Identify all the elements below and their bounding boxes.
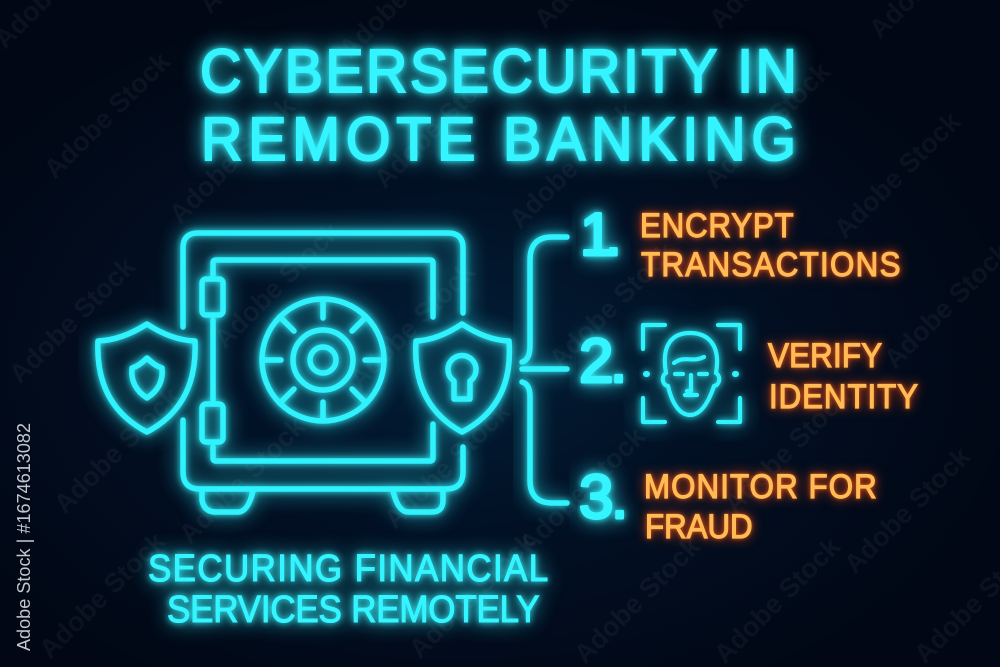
title (200, 36, 797, 173)
watermarks: Adobe Stock (208, 216, 347, 354)
watermarks: Adobe Stock (48, 381, 187, 519)
watermarks: Adobe Stock (3, 251, 142, 389)
title: REMOTE BANKING (201, 104, 796, 173)
title: CYBERSECURITY IN (200, 36, 797, 105)
step 2 label: IDENTITY (769, 377, 918, 415)
watermarks: Adobe Stock (38, 46, 177, 184)
watermarks: Adobe Stock (378, 396, 517, 534)
watermarks: Adobe Stock (513, 421, 652, 559)
watermarks: Adobe Stock (838, 441, 977, 579)
step 2 label (768, 336, 918, 415)
step 2 number: . (610, 327, 627, 396)
step 1 label (640, 206, 900, 283)
watermarks: Adobe Stock (163, 91, 302, 229)
icon: right shield with keyhole (416, 324, 509, 432)
watermarks: Adobe Stock (368, 56, 507, 194)
icon: safe (183, 233, 463, 512)
watermarks: Adobe Stock (403, 526, 542, 664)
step 1 label: TRANSACTIONS (641, 245, 900, 283)
step 3 number: . (611, 463, 628, 532)
watermarks: Adobe Stock (568, 531, 707, 667)
dial (262, 299, 384, 421)
watermarks: Adobe Stock (503, 96, 642, 234)
subtitle: SERVICES REMOTELY (167, 588, 540, 630)
subtitle: SECURING FINANCIAL (148, 547, 548, 589)
step 2 number: 2 (579, 327, 613, 396)
step 1 number: 1 (580, 201, 613, 268)
step 3 label: MONITOR FOR (644, 467, 877, 505)
step 1 label: ENCRYPT (640, 206, 794, 244)
step 1 number: . (605, 201, 622, 268)
vertical stock credit: Adobe Stock | #1674613082 (14, 423, 34, 651)
bracket connector (522, 237, 567, 503)
watermarks: Adobe Stock (828, 106, 967, 244)
watermarks: Adobe Stock (343, 256, 482, 394)
watermarks: Adobe Stock (173, 411, 312, 549)
safe feet (202, 491, 443, 512)
hinge bottom (202, 404, 223, 442)
watermarks: Adobe Stock (718, 381, 857, 519)
step 3 label: FRAUD (645, 507, 753, 545)
watermarks: Adobe Stock (698, 56, 837, 194)
watermarks: Adobe Stock (543, 236, 682, 374)
step 3 number: 3 (579, 463, 613, 532)
step 2 label: VERIFY (768, 336, 882, 374)
icon: face scan (643, 325, 740, 422)
subtitle (148, 547, 548, 630)
hinge top (202, 279, 223, 315)
watermarks: Adobe Stock (33, 526, 172, 664)
watermarks: Adobe Stock (708, 531, 847, 667)
step 3 label (644, 467, 877, 545)
icon: left shield (98, 324, 195, 432)
